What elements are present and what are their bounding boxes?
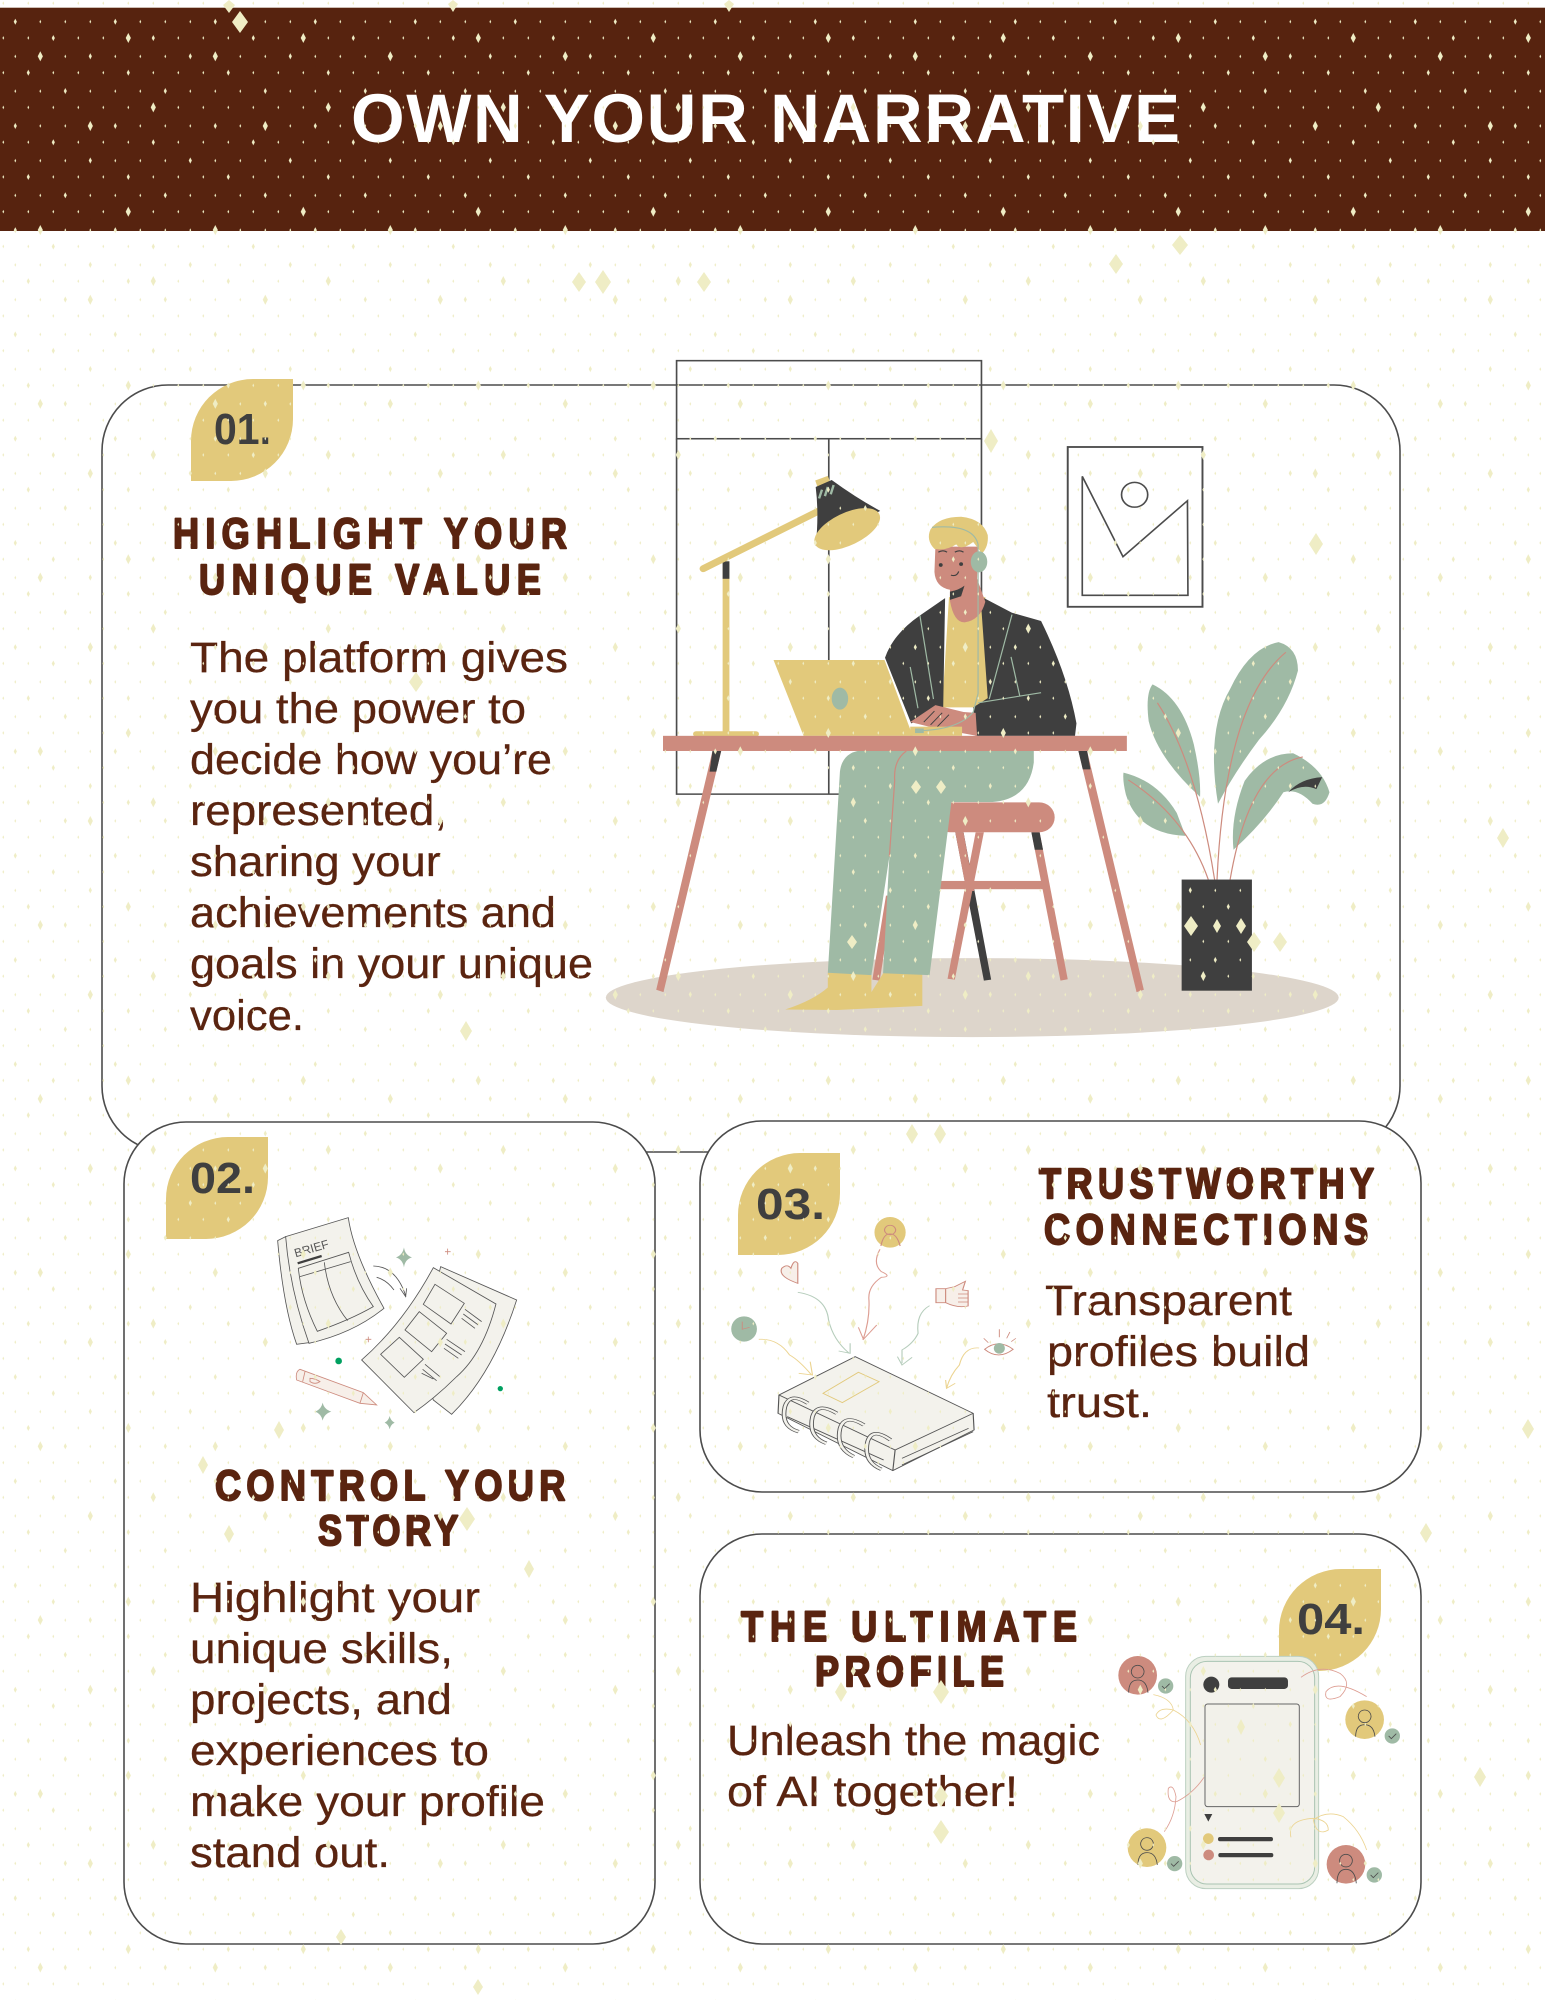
curved arrows [373, 1266, 407, 1297]
heading: the ultimate profile [741, 1603, 1077, 1696]
curly arrows [759, 1249, 979, 1388]
text block: card 1 body: decide how you’re [190, 736, 552, 784]
window frame [677, 361, 981, 794]
wall picture [1068, 447, 1202, 607]
title: OWN YOUR NARRATIVE [351, 80, 1180, 157]
heading: the ultimate profile: THE ULTIMATE [741, 1603, 1077, 1651]
panel: card 1 outline [102, 385, 1400, 1152]
desk lamp [693, 476, 887, 737]
pencil [296, 1369, 377, 1405]
badge: 03 [738, 1153, 840, 1255]
heading: highlight your unique value [173, 510, 567, 604]
text block: card 1 body: you the power to [190, 685, 526, 733]
badge: 01 [191, 379, 293, 481]
brief page [278, 1218, 384, 1344]
text block: card 2 body [190, 1574, 545, 1877]
text block: card 1 body: goals in your unique [190, 940, 593, 988]
layout pages [362, 1267, 517, 1414]
text block: card 4 body: of AI together! [727, 1768, 1018, 1816]
badge: 02: 02. [190, 1154, 255, 1203]
text block: card 3 body: profiles build [1047, 1328, 1310, 1376]
text block: card 1 body: represented, [190, 787, 447, 835]
avatar top right [1345, 1700, 1400, 1744]
heading: control your story [215, 1462, 565, 1555]
heading: trustworthy connections [1039, 1160, 1374, 1254]
icon: heart [781, 1262, 798, 1283]
badge: 03: 03. [756, 1180, 825, 1229]
shoes [785, 973, 922, 1010]
laptop [774, 660, 977, 736]
text block: card 2 body: projects, and [190, 1676, 452, 1724]
illustration: notebook with incoming reactions [731, 1217, 1016, 1471]
heading: trustworthy connections: CONNECTIONS [1044, 1206, 1368, 1254]
badge: 02 [166, 1137, 268, 1239]
brief page: BRIEF [293, 1237, 330, 1260]
illustration: brief documents and pencil [278, 1218, 517, 1429]
heading: control your story: STORY [318, 1507, 458, 1555]
text block: card 1 body: The platform gives [190, 634, 568, 682]
illustration: person working at desk [606, 361, 1339, 1037]
desk legs [656, 751, 1144, 992]
text block: card 4 body: Unleash the magic [727, 1717, 1100, 1765]
illustration: phone profile with avatars [1118, 1656, 1400, 1889]
heading: the ultimate profile: PROFILE [815, 1648, 1004, 1696]
panel: card 4 outline [700, 1534, 1421, 1944]
panel: card 3 outline [700, 1121, 1421, 1492]
text block: card 1 body: achievements and [190, 889, 556, 937]
avatar top left [1118, 1656, 1173, 1695]
person torso and jacket [885, 596, 1076, 736]
text block: card 1 body: sharing your [190, 838, 441, 886]
text block: card 3 body: trust. [1047, 1379, 1152, 1427]
text block: card 3 body [1045, 1277, 1310, 1427]
potted plant [1123, 642, 1329, 991]
trousers [828, 750, 1034, 975]
text block: card 2 body: unique skills, [190, 1625, 453, 1673]
heading: control your story: CONTROL YOUR [215, 1462, 565, 1510]
text block: card 3 body: Transparent [1045, 1277, 1292, 1325]
stool [872, 802, 1068, 981]
icon: person circle [874, 1217, 906, 1248]
badge: 01: 01. [214, 405, 271, 454]
icon: clock circle [731, 1316, 757, 1342]
notebook [778, 1357, 974, 1471]
phone body [1186, 1656, 1319, 1889]
avatar bottom right [1327, 1845, 1382, 1884]
text block: card 4 body [727, 1717, 1100, 1816]
icon: thumbs up [936, 1281, 968, 1307]
icon: eye [984, 1329, 1016, 1355]
text block: card 2 body: make your profile [190, 1778, 545, 1826]
badge: 04 [1279, 1569, 1381, 1671]
heading: highlight your unique value: HIGHLIGHT YOUR [173, 510, 567, 558]
text block: card 1 body: voice. [190, 992, 304, 1040]
sparkles and dots [315, 1247, 503, 1429]
ground ellipse [606, 958, 1339, 1037]
text block: card 2 body: stand out. [190, 1829, 390, 1877]
heading: trustworthy connections: TRUSTWORTHY [1039, 1160, 1374, 1208]
text block: card 2 body: Highlight your [190, 1574, 480, 1622]
text block: card 2 body: experiences to [190, 1727, 489, 1775]
heading: highlight your unique value: UNIQUE VALUE [199, 556, 541, 604]
text block: card 1 body [190, 634, 593, 1040]
avatar bottom left [1128, 1828, 1182, 1871]
header banner [0, 7, 1545, 231]
desk top [663, 736, 1127, 751]
panel: card 2 outline [124, 1122, 655, 1944]
connector curls [1153, 1669, 1367, 1850]
head with headphones [915, 517, 988, 733]
badge: 04: 04. [1297, 1595, 1365, 1644]
